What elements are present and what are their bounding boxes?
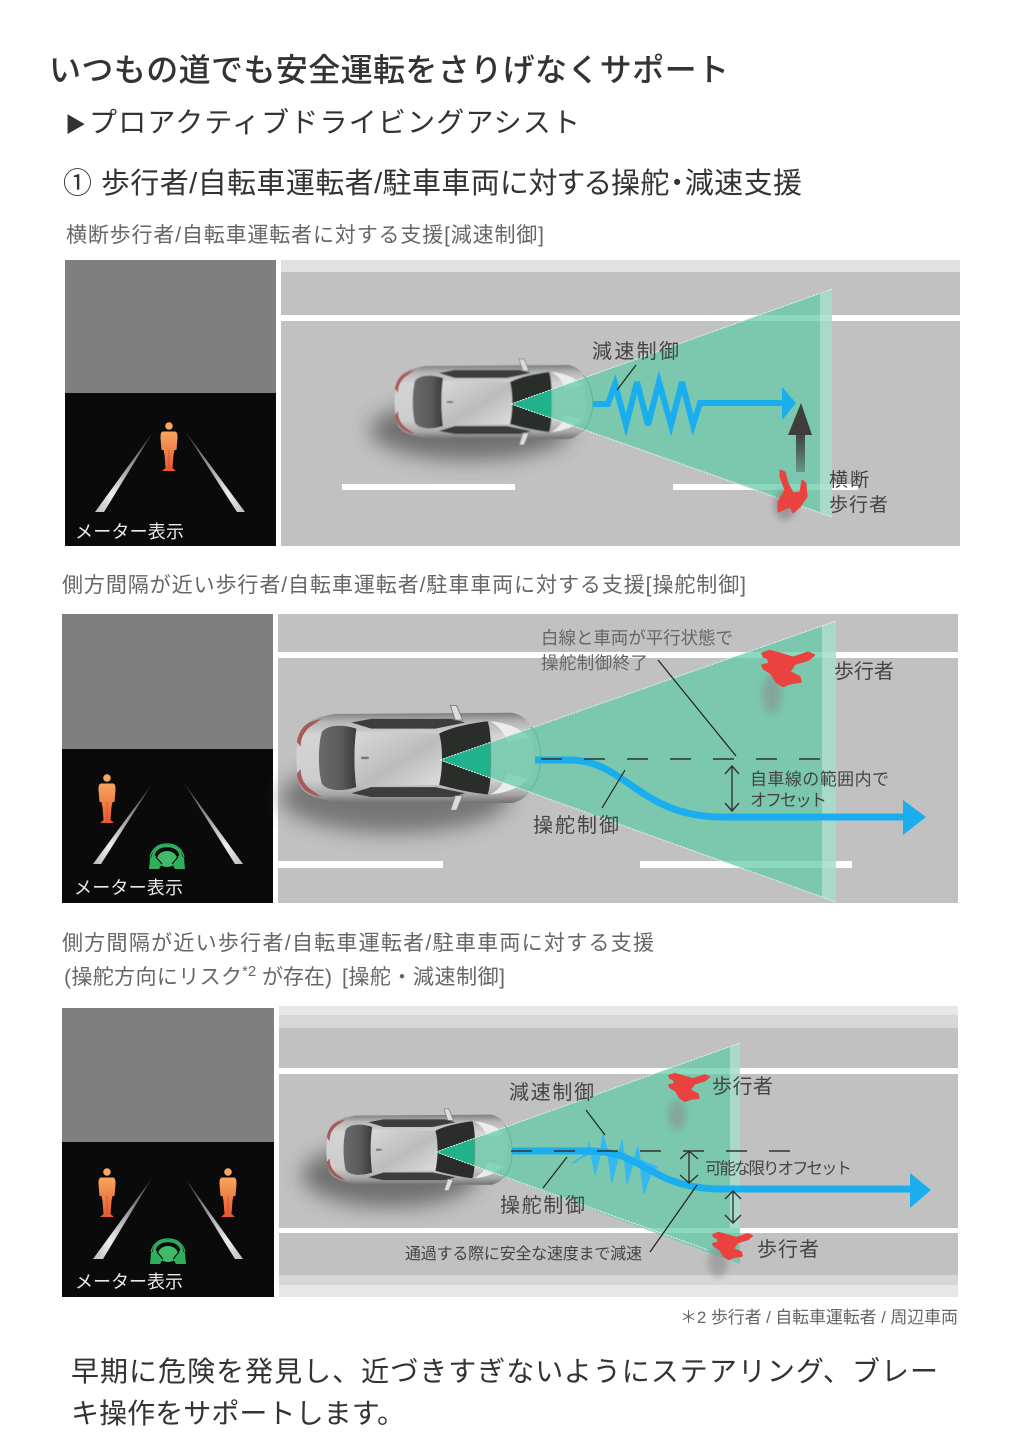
panel heading 1: 横断歩行者/自転車運転者に対する支援[減速制御]	[66, 224, 544, 247]
label: crossing pedestrian: 歩行者	[829, 494, 888, 516]
blue wave: deceleration control	[573, 1135, 657, 1193]
panel 2: meter display	[62, 614, 273, 903]
panel heading 3: *2	[242, 963, 256, 980]
label: deceleration control: 減速制御	[592, 340, 679, 363]
label: end of steering control: 操舵制御終了	[541, 653, 648, 673]
panel heading 3: [操舵・減速制御]	[342, 966, 505, 989]
label: slow to safe speed: 通過する際に安全な速度まで減速	[405, 1245, 642, 1263]
panel 3: road scene	[279, 1006, 958, 1297]
label: end of steering control: 白線と車両が平行状態で	[541, 628, 733, 648]
panel 2: road scene	[278, 614, 958, 903]
label: steering control: 操舵制御	[533, 814, 619, 837]
pedestrian figure	[778, 470, 807, 513]
blue zigzag arrow: deceleration control	[593, 382, 796, 425]
label: offset within own lane: オフセット	[750, 791, 827, 810]
pedestrian figure: lower	[713, 1233, 752, 1259]
body text: キ操作をサポートします。	[71, 1398, 405, 1429]
section heading: ① 歩行者/自転車運転者/駐車車両に対する操舵・減速支援	[63, 167, 802, 200]
blue steering arrow	[535, 760, 926, 835]
label: steering control: 操舵制御	[500, 1194, 585, 1217]
blue steering arrow	[512, 1151, 931, 1208]
panel 3: meter display: メーター表示	[75, 1272, 183, 1292]
label: upper pedestrian: 歩行者	[712, 1075, 773, 1098]
panel 3: meter display	[62, 1008, 274, 1297]
label: deceleration control: 減速制御	[509, 1081, 594, 1104]
panel heading 3: 側方間隔が近い歩行者/自転車運転者/駐車車両に対する支援	[62, 932, 654, 955]
panel heading 3: (操舵方向にリスク	[64, 966, 242, 989]
body text: 早期に危険を発見し、近づきすぎないようにステアリング、ブレー	[71, 1356, 938, 1387]
panel 1: meter display	[65, 260, 276, 546]
label: crossing pedestrian: 横断	[829, 469, 869, 491]
dark arrow: pedestrian crossing direction	[788, 403, 812, 472]
label: offset as far as possible: 可能な限りオフセット	[705, 1159, 852, 1178]
panel heading 3: が存在)	[262, 966, 332, 989]
pedestrian figure: upper	[669, 1074, 709, 1101]
label: pedestrian: 歩行者	[834, 660, 894, 683]
lower offset double arrow	[725, 1191, 741, 1223]
subtitle: proactive driving assist: ▶	[65, 114, 86, 137]
panel 1: road scene	[281, 260, 960, 546]
pedestrian figure	[762, 651, 814, 686]
upper offset double arrow	[680, 1151, 698, 1183]
panel 1: meter display: メーター表示	[75, 522, 184, 542]
label: lower pedestrian: 歩行者	[757, 1238, 819, 1261]
panel 2: meter display: メーター表示	[74, 878, 183, 898]
label: offset within own lane: 自車線の範囲内で	[750, 770, 889, 789]
offset double arrow	[725, 766, 739, 811]
subtitle: proactive driving assist: プロアクティブドライビングアシスト	[89, 107, 580, 138]
title: いつもの道でも安全運転をさりげなくサポート	[49, 52, 729, 88]
panel heading 2: 側方間隔が近い歩行者/自転車運転者/駐車車両に対する支援[操舵制御]	[62, 574, 746, 597]
footnote: ＊2 歩行者 / 自転車運転者 / 周辺車両	[680, 1308, 958, 1327]
